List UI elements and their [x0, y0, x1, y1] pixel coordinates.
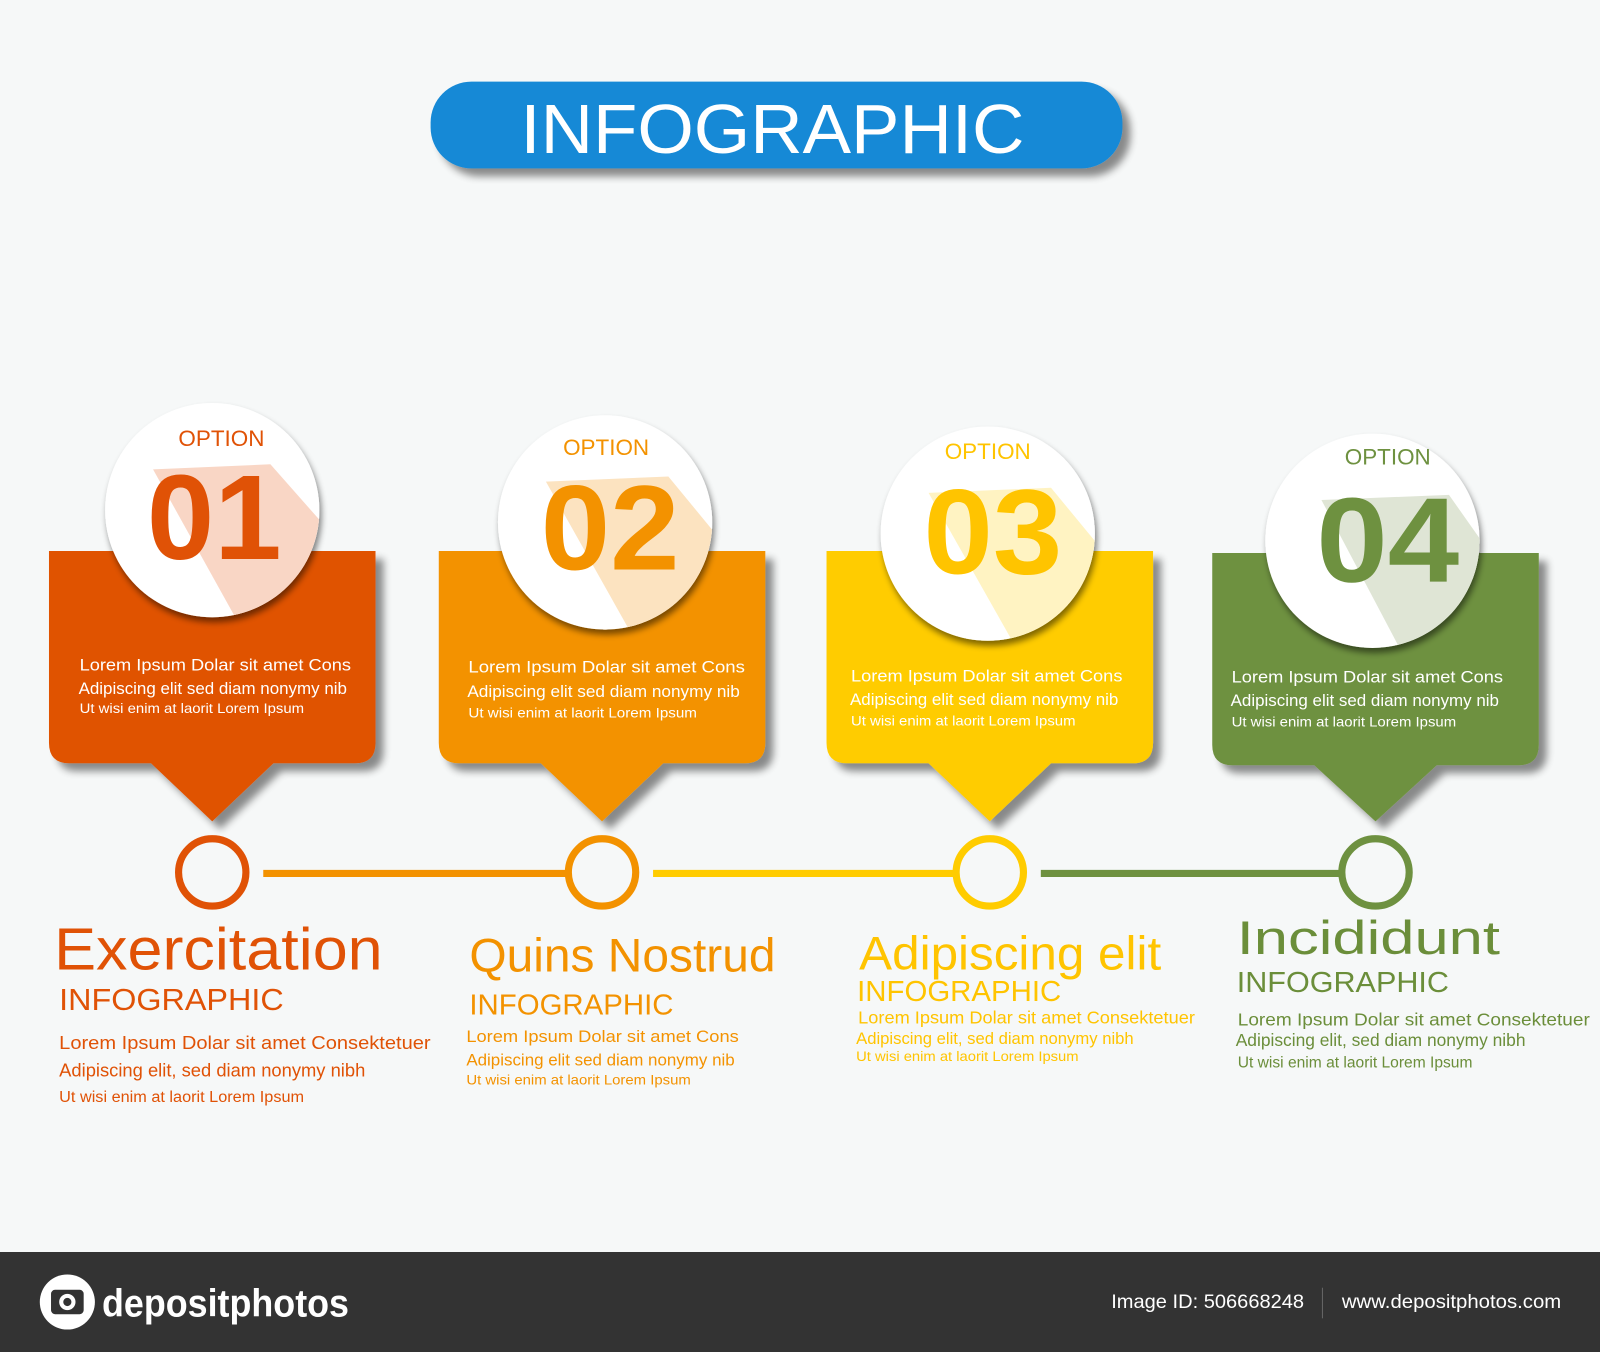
footer bar: depositphotos [102, 1282, 349, 1325]
icon: number circle 03 [878, 426, 1102, 650]
icon: number circle 02: OPTION [563, 435, 649, 460]
text block: Incididunt: Incididunt [1237, 912, 1500, 964]
text block: Ut wisi enim at laorit Lorem Ipsum [468, 705, 697, 721]
text block: Quins Nostrud: Quins Nostrud [469, 929, 776, 981]
text block: Adipiscing elit sed diam nonymy nib [467, 683, 740, 701]
panel: option 03 [827, 427, 1153, 821]
panel: option 04 [1212, 434, 1539, 821]
text block: Adipiscing elit sed diam nonymy nib [1231, 692, 1499, 710]
text block: Adipiscing elit [856, 927, 1195, 1065]
text block: Quins Nostrud: Ut wisi enim at laorit Lorem Ipsum [466, 1073, 691, 1089]
text block: Adipiscing elit: Adipiscing elit, sed diam nonymy nibh [856, 1030, 1134, 1048]
text block: Adipiscing elit: Lorem Ipsum Dolar sit amet Consektetuer [858, 1007, 1195, 1027]
footer bar: www.depositphotos.com [1341, 1291, 1561, 1313]
text block: Lorem Ipsum Dolar sit amet Cons [468, 658, 745, 676]
text block: Adipiscing elit: INFOGRAPHIC [857, 976, 1061, 1008]
text block: Quins Nostrud: Adipiscing elit sed diam nonymy nib [466, 1051, 735, 1069]
text block: Quins Nostrud: Lorem Ipsum Dolar sit amet Cons [466, 1028, 739, 1046]
icon: number circle 04: OPTION [1345, 444, 1431, 469]
icon: number circle 02: 02 [541, 460, 680, 595]
icon: number circle 03: OPTION [945, 439, 1031, 464]
text block: Lorem Ipsum Dolar sit amet Cons [1232, 669, 1503, 687]
text block: Exercitation: Ut wisi enim at laorit Lorem Ipsum [59, 1089, 304, 1106]
text block: Exercitation: Adipiscing elit, sed diam nonymy nibh [59, 1059, 365, 1080]
text block: Incididunt: Adipiscing elit, sed diam nonymy nibh [1236, 1030, 1526, 1050]
text block: Quins Nostrud [466, 929, 776, 1089]
text block: Exercitation [54, 915, 431, 1106]
title banner: INFOGRAPHIC [520, 90, 1024, 168]
text block: Adipiscing elit: Ut wisi enim at laorit Lorem Ipsum [856, 1049, 1079, 1065]
text block: Exercitation: Exercitation [54, 915, 383, 982]
icon: number circle 01: 01 [147, 450, 282, 585]
text block: Ut wisi enim at laorit Lorem Ipsum [1232, 715, 1456, 731]
panel: option 01 [49, 403, 376, 821]
icon: number circle 02 [496, 416, 719, 639]
icon: number circle 04: 04 [1316, 473, 1459, 608]
footer bar [0, 1252, 1600, 1352]
text block: Incididunt: Ut wisi enim at laorit Lorem Ipsum [1238, 1054, 1472, 1071]
timeline [179, 839, 1409, 906]
icon: camera logo [40, 1274, 95, 1330]
text block: Quins Nostrud: INFOGRAPHIC [469, 989, 673, 1021]
text block [467, 658, 745, 721]
text block: Adipiscing elit sed diam nonymy nib [850, 691, 1118, 709]
text block: Incididunt [1236, 912, 1590, 1071]
text block: Exercitation: Lorem Ipsum Dolar sit amet Consektetuer [59, 1032, 431, 1053]
text block [1231, 669, 1503, 731]
title banner [431, 82, 1122, 168]
text block [79, 656, 351, 717]
panel: option 02 [439, 415, 765, 821]
text block: Exercitation: INFOGRAPHIC [59, 983, 284, 1017]
icon: number circle 01: OPTION [178, 426, 264, 451]
icon: number circle 01 [102, 403, 326, 626]
icon: number circle 03: 03 [923, 464, 1062, 599]
footer bar: Image ID: 506668248 [1111, 1291, 1304, 1313]
text block: Lorem Ipsum Dolar sit amet Cons [80, 656, 351, 674]
text block: Incididunt: Lorem Ipsum Dolar sit amet Consektetuer [1238, 1009, 1590, 1029]
text block: Lorem Ipsum Dolar sit amet Cons [851, 668, 1122, 686]
text block [850, 668, 1122, 729]
text block: Incididunt: INFOGRAPHIC [1237, 967, 1449, 999]
text block: Adipiscing elit sed diam nonymy nib [79, 680, 347, 698]
text block: Ut wisi enim at laorit Lorem Ipsum [851, 713, 1076, 729]
icon: number circle 04 [1262, 434, 1486, 656]
text block: Ut wisi enim at laorit Lorem Ipsum [80, 701, 304, 717]
text block: Adipiscing elit: Adipiscing elit [859, 927, 1161, 979]
